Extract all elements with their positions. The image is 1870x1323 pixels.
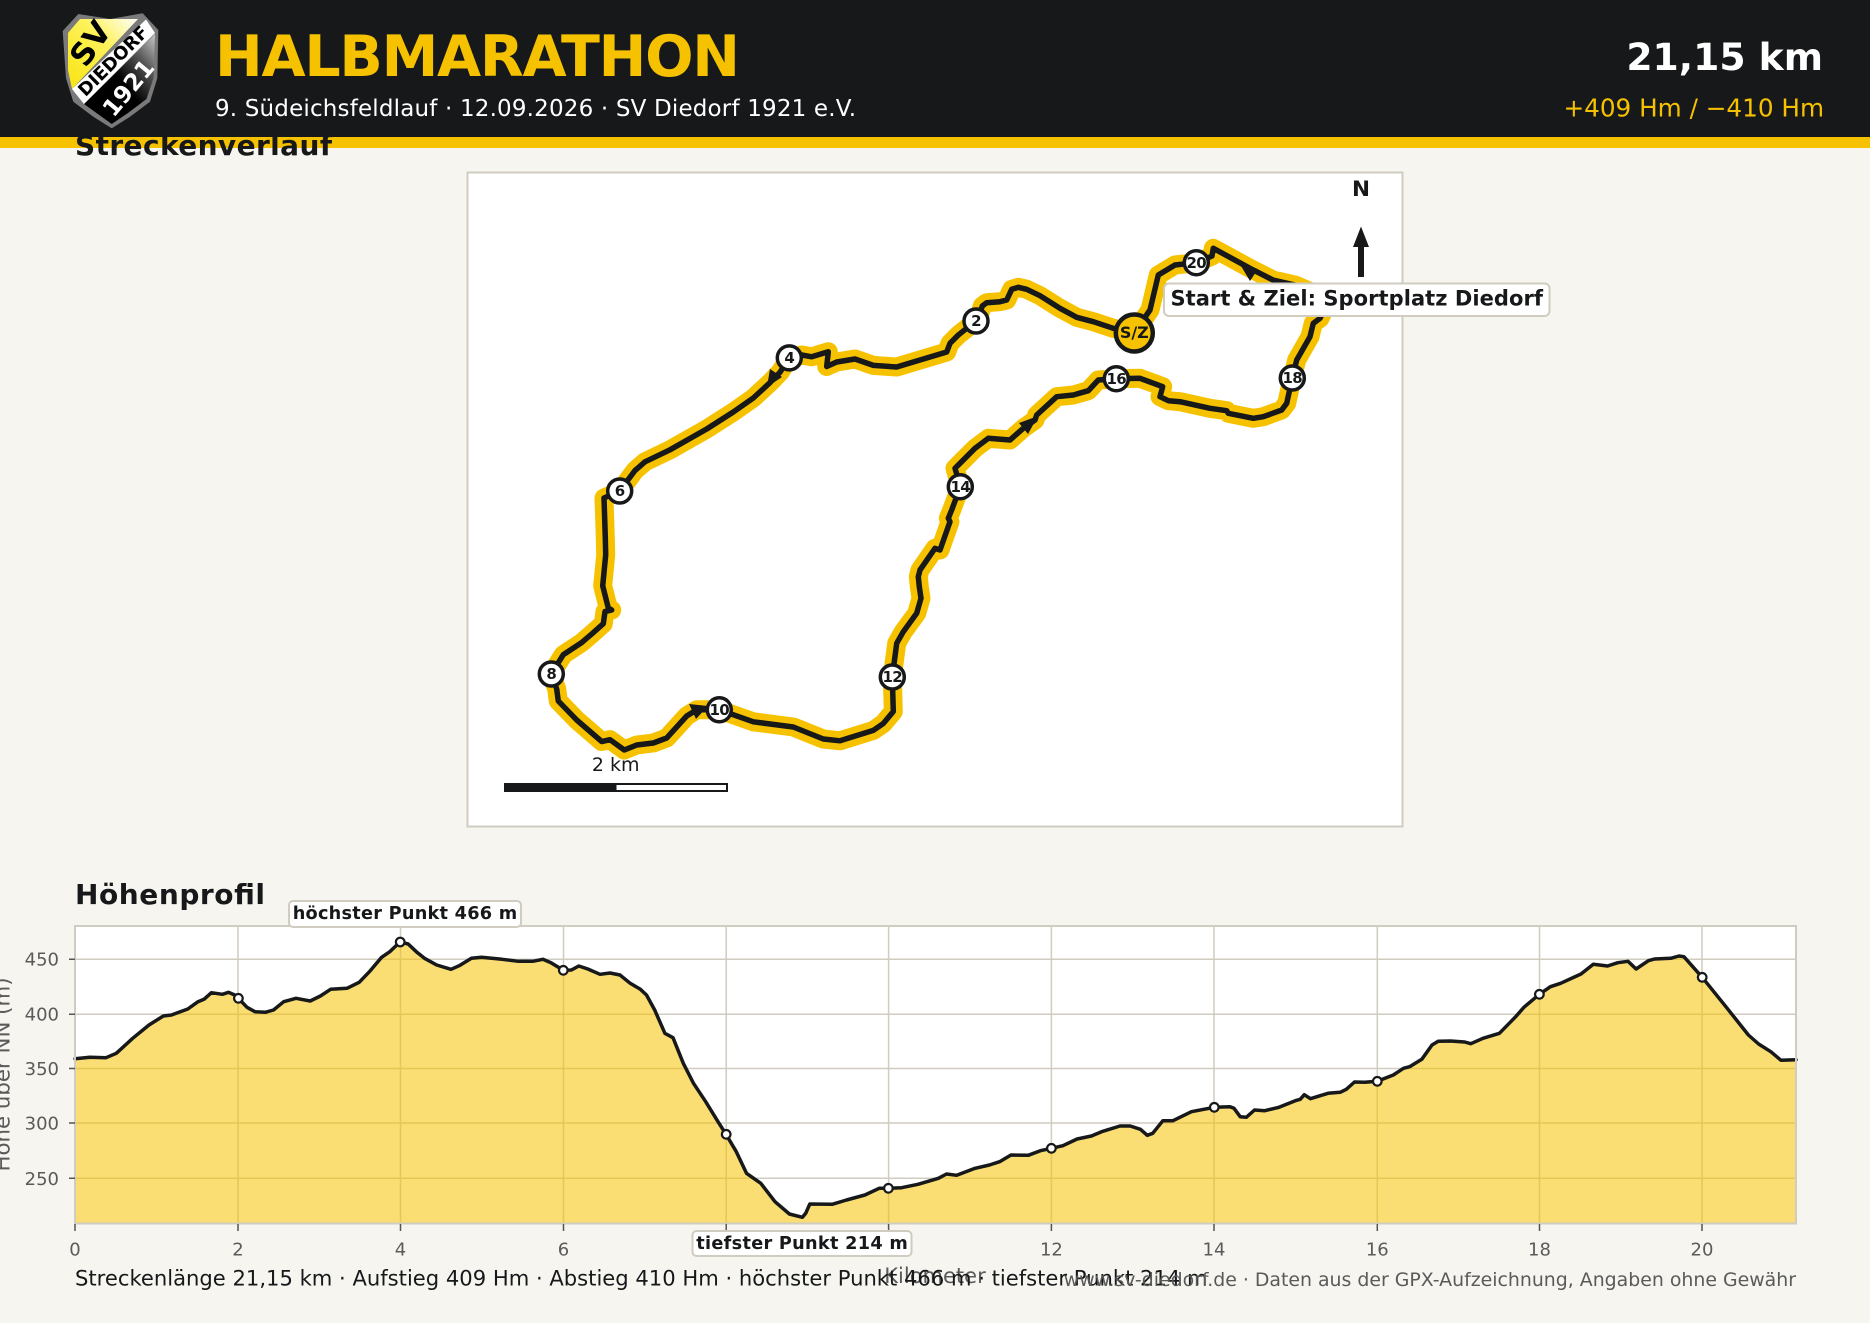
kilometre marker numbers: 14 [950, 478, 970, 496]
heading: Streckenverlauf: Streckenverlauf [75, 129, 333, 162]
x axis labels: 12 [1040, 1240, 1063, 1260]
subtitle: 9. Südeichsfeldlauf · 12.09.2026 · SV Diedorf 1921 e.V. [215, 96, 856, 122]
kilometre marker numbers [546, 254, 1302, 719]
y axis labels: 400 [25, 1005, 59, 1026]
y axis labels [25, 950, 59, 1190]
x axis labels: 0 [69, 1240, 81, 1260]
y axis labels: 450 [25, 950, 59, 971]
footer: source note: www.sv-diedorf.de · Daten aus der GPX-Aufzeichnung, Angaben ohne Gewähr [1064, 1269, 1796, 1291]
x axis labels: 8 [720, 1240, 732, 1260]
grid lines [75, 926, 1796, 1223]
callout: lowest point: tiefster Punkt 214 m [696, 1234, 908, 1254]
icon: SV Diedorf club crest [63, 13, 160, 128]
icon: SV Diedorf club crest: DIEDORF [74, 22, 153, 101]
header band [0, 0, 1870, 148]
kilometre marker numbers: 16 [1106, 370, 1126, 388]
x axis labels [69, 1240, 1713, 1260]
y axis labels: 300 [25, 1114, 59, 1134]
kilometre marker numbers: 2 [971, 312, 981, 330]
kilometre marker numbers: 8 [546, 665, 556, 683]
y axis labels: 350 [25, 1059, 59, 1080]
direction arrows [689, 266, 1258, 719]
icon: SV Diedorf club crest: SV [63, 15, 119, 73]
scale bar [504, 754, 727, 792]
elevation profile chart [0, 901, 1796, 1288]
distance: 21,15 km [1626, 35, 1823, 79]
x axis labels: 18 [1528, 1240, 1551, 1260]
north arrow [1352, 177, 1370, 277]
x axis labels: 10 [877, 1240, 900, 1260]
y axis labels: 250 [25, 1169, 59, 1190]
footer: route summary: Streckenlänge 21,15 km · Aufstieg 409 Hm · Abstieg 410 Hm · höchster Punkt 466 m · tiefster Punkt 214 m [75, 1266, 1208, 1290]
plot frame [75, 926, 1796, 1224]
kilometre marker numbers: 12 [882, 668, 902, 686]
callout: highest point: höchster Punkt 466 m [293, 904, 517, 924]
route line [551, 248, 1326, 750]
kilometre marker numbers: 18 [1282, 369, 1302, 387]
title: HALBMARATHON [215, 24, 740, 90]
start and finish marker: S/Z [1120, 323, 1149, 342]
kilometre marker numbers: 20 [1186, 254, 1206, 272]
callout: start and finish: Start & Ziel: Sportplatz Diedorf [1170, 286, 1544, 310]
heading: Höhenprofil: Höhenprofil [75, 878, 265, 911]
elevation gain and loss: +409 Hm / −410 Hm [1563, 94, 1824, 122]
x axis labels: 16 [1366, 1240, 1389, 1260]
icon: SV Diedorf club crest: 1921 [97, 54, 160, 122]
x axis labels: 20 [1691, 1240, 1713, 1260]
axis ticks [69, 959, 1702, 1231]
panel: route map [468, 172, 1550, 826]
kilometre marker numbers: 4 [784, 349, 794, 367]
profile line [75, 942, 1796, 1217]
x axis title: Kilometer [884, 1264, 986, 1288]
kilometre markers [539, 251, 1304, 722]
area under profile [75, 942, 1796, 1223]
kilometre marker numbers: 6 [615, 482, 625, 500]
x axis labels: 4 [395, 1240, 406, 1260]
scale bar: 2 km [592, 754, 640, 776]
kilometre points on profile [234, 938, 1706, 1193]
start and finish marker [1116, 314, 1153, 352]
kilometre marker numbers: 10 [709, 701, 729, 719]
x axis labels: 6 [558, 1240, 569, 1260]
north arrow: N [1352, 177, 1370, 202]
x axis labels: 14 [1203, 1240, 1225, 1260]
x axis labels: 2 [232, 1240, 244, 1260]
